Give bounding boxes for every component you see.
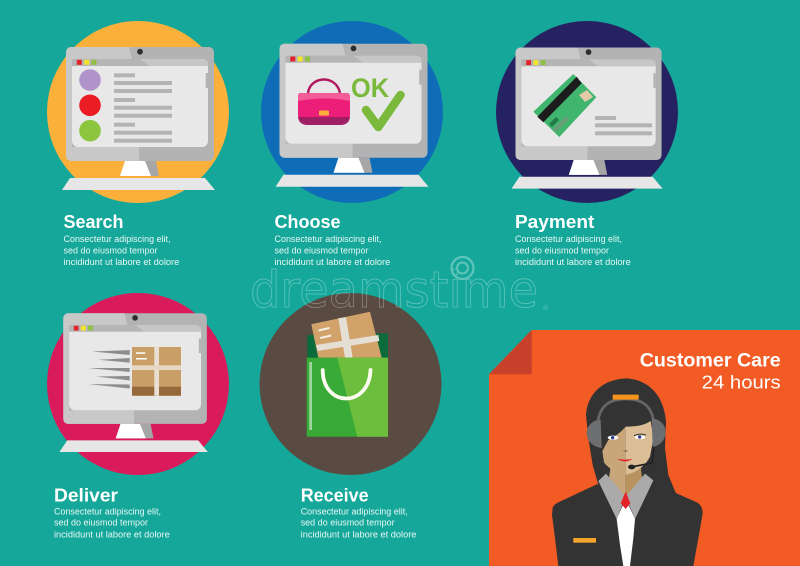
panel: receive <box>260 293 442 539</box>
panel: choose <box>261 21 443 267</box>
deliver monitor <box>59 313 208 452</box>
payment description: sed do eiusmod tempor <box>515 246 609 256</box>
icon: pink handbag <box>298 79 350 125</box>
icon: parcel <box>132 347 181 396</box>
receive description: incididunt ut labore et dolore <box>301 529 416 539</box>
folded corner <box>489 330 532 374</box>
payment monitor <box>512 48 663 189</box>
icon: speed lines <box>88 350 130 388</box>
payment description: Consectetur adipiscing elit, <box>515 234 622 244</box>
payment circle <box>496 21 678 203</box>
icon: check mark <box>366 95 400 127</box>
choose description: incididunt ut labore et dolore <box>274 257 390 267</box>
choose circle <box>261 21 443 203</box>
panel: deliver <box>47 293 229 539</box>
24 hours label: 24 hours <box>702 372 781 392</box>
agent figure with headset <box>552 378 703 566</box>
search results list <box>79 69 172 143</box>
choose description: sed do eiusmod tempor <box>274 246 368 256</box>
deliver description: incididunt ut labore et dolore <box>54 529 170 539</box>
choose heading: Choose <box>274 212 340 232</box>
deliver description: sed do eiusmod tempor <box>54 518 148 528</box>
choose description: Consectetur adipiscing elit, <box>274 234 382 244</box>
payment heading: Payment <box>515 212 594 232</box>
panel: customer care <box>489 330 800 566</box>
search heading: Search <box>64 212 124 232</box>
search description: sed do eiusmod tempor <box>64 246 158 256</box>
receive heading: Receive <box>301 486 369 506</box>
watermark: dreamstime <box>250 261 538 319</box>
choose monitor <box>276 44 428 187</box>
icon: shopping bag with parcel <box>307 312 388 437</box>
orange note background <box>489 330 800 566</box>
search description <box>64 234 179 267</box>
payment description: incididunt ut labore et dolore <box>515 257 631 267</box>
receive description: sed do eiusmod tempor <box>301 518 395 528</box>
customer care heading: Customer Care <box>640 350 781 372</box>
panel: search <box>47 21 229 267</box>
search description: Consectetur adipiscing elit, <box>64 234 170 244</box>
payment description <box>515 234 631 267</box>
receive description: Consectetur adipiscing elit, <box>301 506 408 516</box>
deliver description <box>54 506 170 539</box>
search description: incididunt ut labore et dolore <box>64 257 179 267</box>
payment text lines <box>595 116 652 135</box>
search circle <box>47 21 229 203</box>
OK label: OK <box>351 73 389 103</box>
deliver heading: Deliver <box>54 486 118 506</box>
choose description <box>274 234 390 267</box>
panel: payment <box>496 21 678 267</box>
icon: credit card <box>533 74 596 137</box>
deliver circle <box>47 293 229 475</box>
watermark: ® <box>543 304 549 312</box>
deliver description: Consectetur adipiscing elit, <box>54 506 161 516</box>
search monitor <box>62 47 215 190</box>
receive circle <box>260 293 442 475</box>
receive description <box>301 506 416 539</box>
